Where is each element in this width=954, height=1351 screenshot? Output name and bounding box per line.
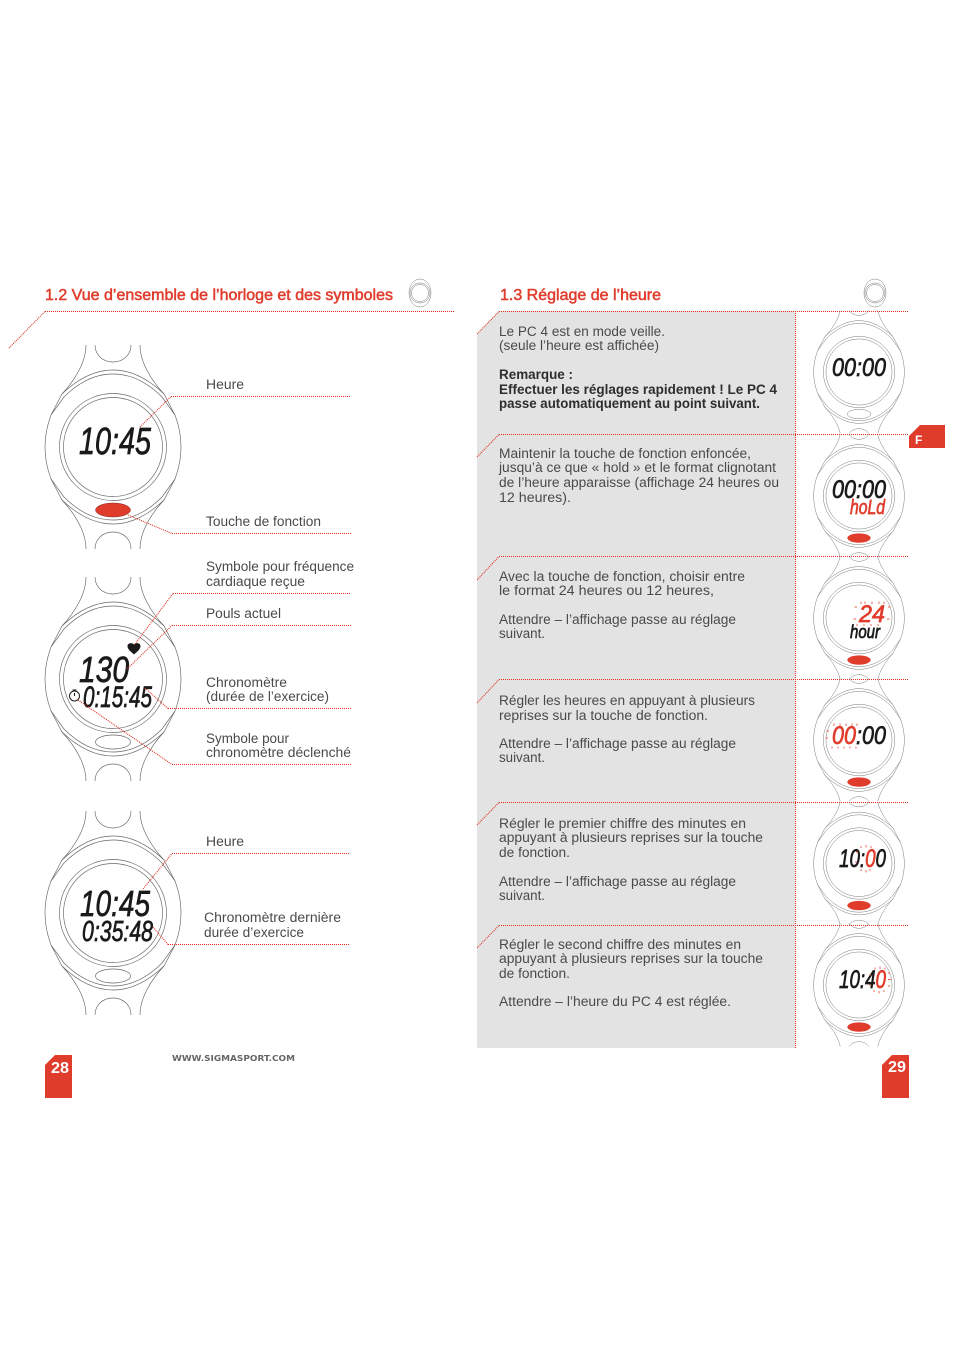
flashing ticks (869, 966, 891, 994)
label: current pulse (127, 606, 351, 669)
label: Heure: Heure (206, 377, 244, 392)
page number 29 (882, 1055, 909, 1098)
label: Touche de fonction: Touche de fonction (206, 514, 321, 529)
step 6 text: de fonction. (499, 966, 570, 981)
label: Heure (143, 834, 349, 889)
display: 24: 24 (858, 601, 885, 628)
label: stopwatch symbol: chronomètre déclenché (206, 745, 351, 760)
step 4 text: Attendre – l’affichage passe au réglage (499, 736, 736, 751)
label: Heure: Heure (206, 834, 244, 849)
display: hour: hour (850, 622, 881, 642)
label: last stopwatch: Chronomètre dernière (204, 910, 341, 925)
step 4 text (499, 693, 755, 765)
label: stopwatch symbol (78, 700, 351, 764)
label: last stopwatch (153, 910, 350, 944)
step 2 text: de l’heure apparaisse (affichage 24 heures ou (499, 475, 779, 490)
step 2 text: 12 heures). (499, 490, 571, 505)
button: neutral (96, 969, 130, 983)
step 2 text: Maintenir la touche de fonction enfoncée, (499, 446, 751, 461)
button: function key (96, 503, 130, 517)
icon: small watch right heading (864, 279, 886, 307)
heading rule left (9, 312, 454, 348)
step 6 text: Régler le second chiffre des minutes en (499, 937, 741, 952)
display: flashing first minute digit: 10:00 (839, 845, 886, 873)
button: neutral (96, 735, 130, 749)
step 5 text: Attendre – l’affichage passe au réglage (499, 874, 736, 889)
watch step 3 (814, 550, 904, 686)
label: heart symbol: cardiaque reçue (206, 574, 305, 589)
step 3 text (499, 569, 745, 641)
step 3 text: Avec la touche de fonction, choisir entre (499, 569, 745, 584)
step 5 text: Régler le premier chiffre des minutes en (499, 816, 746, 831)
step 4 text: suivant. (499, 750, 545, 765)
heading: 1.3 time setting: 1.3 Réglage de l’heure (500, 287, 661, 304)
watch 2: training display (45, 577, 181, 781)
step 6 text: Attendre – l’heure du PC 4 est réglée. (499, 994, 731, 1009)
website: WWW.SIGMASPORT.COM (172, 1054, 295, 1063)
display: stopwatch: 0:15:45 (83, 681, 152, 714)
display: flashing second minute digit: 10:40 (839, 966, 886, 994)
infographic page (8, 278, 945, 1098)
display: 00:00: 00:00 (832, 354, 886, 382)
step 5 text: appuyant à plusieurs reprises sur la touche (499, 830, 763, 845)
step 1 text: Remarque : (499, 367, 573, 382)
step 1 text: (seule l’heure est affichée) (499, 338, 659, 353)
heading: 1.2 overview: 1.2 Vue d’ensemble de l’horloge et des symboles (45, 287, 393, 304)
label: heart symbol (135, 559, 354, 644)
watch step 1 (814, 304, 904, 440)
step 1 text: Le PC 4 est en mode veille. (499, 324, 665, 339)
display: flashing hours and minutes: 00:00 (832, 722, 886, 750)
watch step 6 (814, 917, 904, 1053)
flashing ticks (855, 845, 876, 872)
step 6 text (499, 937, 763, 1009)
watch 1: time display (45, 345, 181, 549)
icon: small watch left heading (409, 279, 431, 307)
step 2 text (498, 446, 779, 505)
flashing ticks (854, 602, 890, 626)
label: stopwatch: (durée de l’exercice) (206, 689, 329, 704)
label: stopwatch (145, 675, 351, 708)
step 3 text: Attendre – l’affichage passe au réglage (499, 612, 736, 627)
tab: language F: F (915, 433, 922, 447)
watch step 2 (814, 428, 904, 564)
display: time: 10:45 (79, 421, 152, 463)
label: Heure (140, 377, 351, 427)
step 1 text (499, 324, 777, 411)
display: 00:00: 00:00 (832, 476, 886, 504)
label: stopwatch: Chronomètre (206, 675, 287, 690)
step 2 text: jusqu’à ce que « hold » et le format clignotant (498, 460, 776, 475)
step 5 text: de fonction. (499, 845, 570, 860)
step 3 text: suivant. (499, 626, 545, 641)
watch step 5 (814, 795, 904, 932)
step 4 text: reprises sur la touche de fonction. (499, 708, 708, 723)
step 4 text: Régler les heures en appuyant à plusieurs (499, 693, 755, 708)
label: stopwatch symbol: Symbole pour (206, 731, 289, 746)
display: last stopwatch: 0:35:48 (82, 916, 153, 948)
tab: language F (909, 425, 945, 448)
watch 3: last exercise display (45, 811, 181, 1015)
icon: heart (128, 643, 140, 654)
step rules (477, 311, 909, 1048)
label: heart symbol: Symbole pour fréquence (206, 559, 354, 574)
step 1 text: Effectuer les réglages rapidement ! Le PC 4 (499, 382, 777, 397)
panel: grey steps background (477, 311, 795, 1048)
step 5 text: suivant. (499, 888, 545, 903)
icon: stopwatch symbol (70, 690, 80, 701)
display: pulse: 130 (79, 649, 129, 690)
label: last stopwatch: durée d’exercice (204, 925, 304, 940)
display: hold: hoLd (850, 497, 886, 519)
page number 29: 29 (888, 1059, 906, 1076)
label: Touche de fonction (128, 514, 351, 534)
flashing ticks (826, 724, 857, 748)
label: current pulse: Pouls actuel (206, 606, 281, 621)
step 1 text: passe automatiquement au point suivant. (499, 396, 760, 411)
page number 28: 28 (51, 1060, 69, 1077)
step 5 text (499, 816, 763, 903)
display: time: 10:45 (80, 883, 151, 924)
page number 28 (45, 1055, 72, 1098)
watch step 4 (814, 672, 904, 808)
step 6 text: appuyant à plusieurs reprises sur la touche (499, 951, 763, 966)
step 3 text: le format 24 heures ou 12 heures, (499, 583, 714, 598)
